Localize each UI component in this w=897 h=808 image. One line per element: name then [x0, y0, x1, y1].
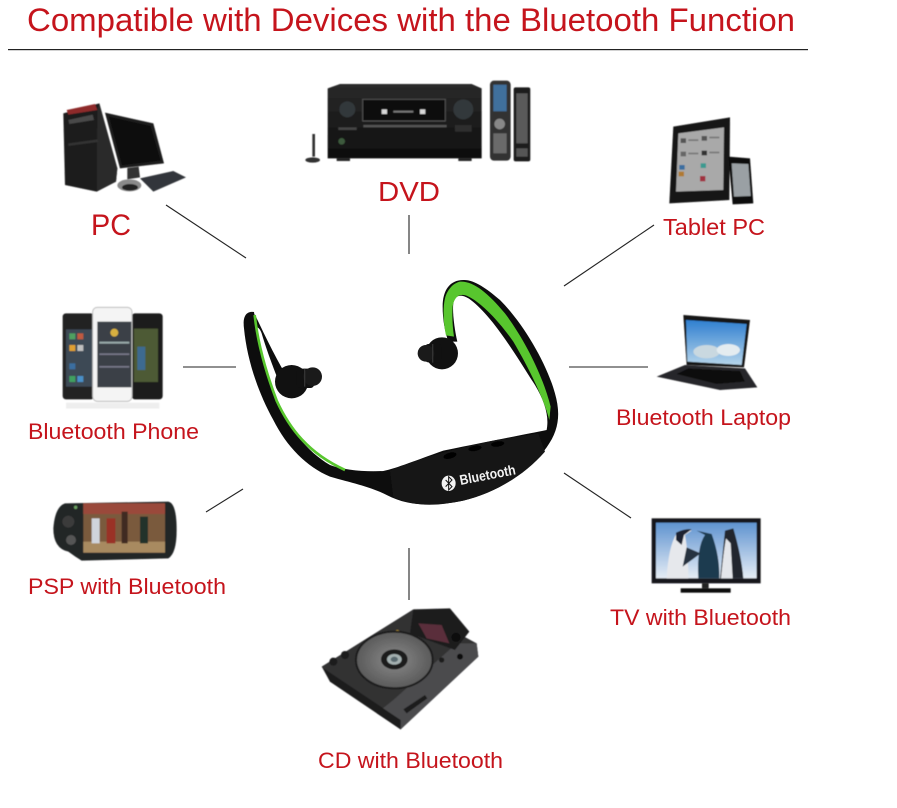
- label: DVD: DVD: [378, 176, 440, 207]
- headset brand text: Bluetooth: [458, 461, 517, 488]
- headset: [244, 280, 558, 505]
- icon: smartphones: [63, 307, 163, 409]
- label: TV with Bluetooth: TV with Bluetooth: [610, 605, 791, 630]
- title: Compatible with Devices with the Bluetooth Function: [27, 2, 795, 38]
- icon: DVD receiver: [305, 81, 530, 163]
- earbud right: [418, 337, 458, 369]
- icon: tablet and phone: [669, 117, 753, 204]
- icon: CD player: [322, 608, 478, 729]
- label: Tablet PC: Tablet PC: [663, 214, 765, 240]
- label: PC: PC: [91, 209, 131, 242]
- earbud left: [275, 365, 322, 398]
- label: Bluetooth Phone: Bluetooth Phone: [28, 419, 199, 444]
- bluetooth logo: [442, 476, 456, 491]
- icon: PC: [63, 103, 186, 192]
- label: PSP with Bluetooth: PSP with Bluetooth: [28, 574, 226, 599]
- connector lines: [166, 205, 654, 600]
- label: Bluetooth Laptop: Bluetooth Laptop: [616, 405, 791, 430]
- label: CD with Bluetooth: CD with Bluetooth: [318, 748, 503, 773]
- icon: PSP console: [53, 502, 177, 561]
- icon: laptop: [657, 315, 757, 390]
- icon: TV: [652, 518, 761, 593]
